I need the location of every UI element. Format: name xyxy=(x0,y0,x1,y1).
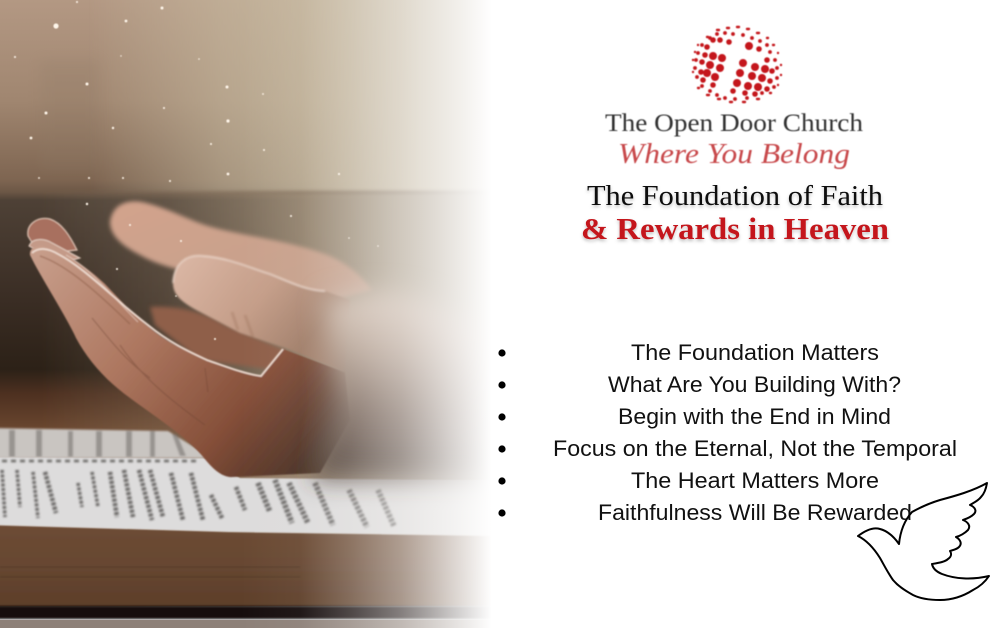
title line 2: & Rewards in Heaven xyxy=(581,211,889,246)
panel: photo of praying hands over a bible xyxy=(0,0,541,628)
hand: back fingers xyxy=(110,201,372,370)
book: edge shading lines xyxy=(0,567,300,577)
logo tagline: Where You Belong xyxy=(618,138,850,170)
bullet 1: The Foundation Matters xyxy=(631,340,879,365)
book: black shadow band xyxy=(0,606,500,619)
book: page edge cover xyxy=(0,525,500,608)
hand: thumb xyxy=(173,256,350,372)
bullet 5: The Heart Matters More xyxy=(631,468,879,493)
bullet 5 xyxy=(498,468,879,493)
sparkles of light xyxy=(14,1,379,340)
bullet 6: Faithfulness Will Be Rewarded xyxy=(598,500,912,525)
bullet 4: Focus on the Eternal, Not the Temporal xyxy=(553,436,957,461)
bullet 2 xyxy=(498,372,901,397)
hand: front palm and fingers xyxy=(30,246,350,477)
bullet list xyxy=(498,340,957,525)
photo background: wall and warm light xyxy=(0,0,500,481)
bullet 3 xyxy=(498,404,891,429)
logo: red dotted globe with cross xyxy=(693,27,781,102)
bullet 2: What Are You Building With? xyxy=(608,372,901,397)
book: printed text xyxy=(2,461,394,527)
book: open page xyxy=(0,457,500,536)
white fade over photo xyxy=(240,0,492,628)
table at bottom xyxy=(0,620,500,628)
title line 1: The Foundation of Faith xyxy=(587,180,884,212)
book: upper page stack xyxy=(0,428,212,458)
hand: rear fingertips xyxy=(28,218,80,264)
bullet 1 xyxy=(498,340,879,365)
hand: wrist fading to grey xyxy=(312,293,500,480)
logo wordmark: church name: The Open Door Church xyxy=(605,110,864,137)
white page background cover xyxy=(491,0,541,628)
icon: dove outline xyxy=(858,483,989,600)
bullet 3: Begin with the End in Mind xyxy=(618,404,891,429)
